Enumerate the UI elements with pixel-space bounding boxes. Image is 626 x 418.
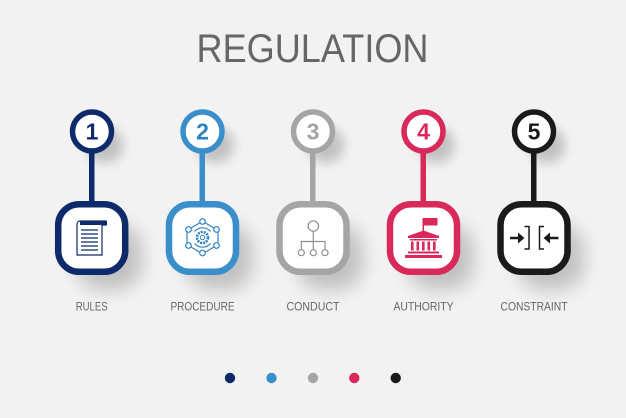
number badge 1	[72, 112, 112, 151]
step 5: constraint	[500, 112, 584, 314]
title: REGULATION	[196, 27, 428, 71]
icon box 4	[390, 204, 457, 272]
icon box 3	[280, 204, 346, 272]
step 1: rules	[58, 112, 142, 314]
step 2: procedure	[169, 112, 252, 314]
step 3: conduct	[280, 112, 363, 314]
icon: org chart	[298, 221, 328, 256]
label: procedure: PROCEDURE	[170, 302, 235, 314]
step 4: authority	[390, 112, 474, 314]
label: rules: RULES	[76, 302, 108, 314]
icon: document	[77, 221, 107, 255]
icon box 2	[169, 204, 236, 272]
legend dots	[225, 373, 401, 383]
icon box 1	[58, 204, 125, 272]
number badge 5: 5	[528, 118, 541, 144]
number badge 3	[294, 112, 332, 151]
number badge 5	[514, 112, 554, 151]
label: conduct: CONDUCT	[286, 302, 340, 314]
number badge 4	[404, 112, 443, 151]
number badge 2	[183, 112, 222, 151]
icon: gear network	[186, 219, 219, 256]
icon: government building with flag	[405, 218, 442, 258]
number badge 3: 3	[307, 118, 319, 144]
number badge 2: 2	[196, 118, 209, 144]
icon box 5	[500, 204, 568, 272]
label: authority: AUTHORITY	[394, 302, 454, 314]
number badge 4: 4	[417, 118, 430, 144]
label: constraint: CONSTRAINT	[500, 302, 568, 314]
number badge 1: 1	[86, 118, 99, 144]
icon: opposing arrows and brackets	[510, 226, 558, 249]
